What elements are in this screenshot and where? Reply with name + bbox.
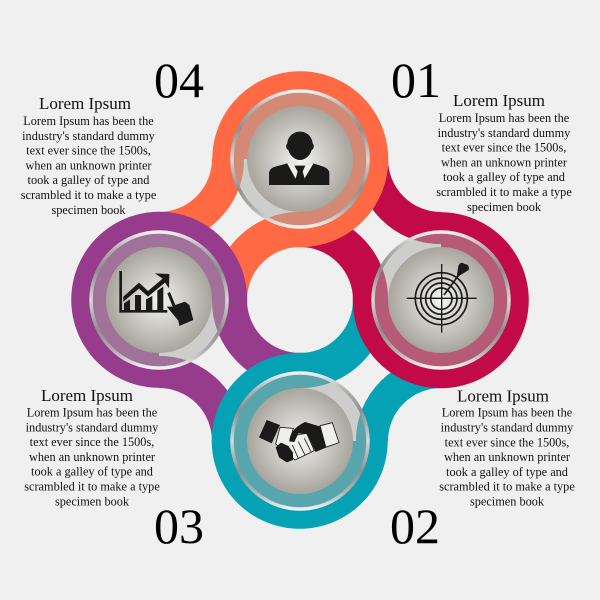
text block: 04: industry's standard dummy <box>22 129 156 143</box>
text block: 03: Lorem Ipsum <box>41 386 133 405</box>
ring: 02 right crimson <box>353 212 529 388</box>
icon: target with dart <box>407 263 477 333</box>
number 01: 01 <box>391 52 441 108</box>
text block: 01 <box>436 91 572 214</box>
ring: 04 left purple <box>71 212 247 388</box>
text block: 04: took a galley of type and <box>28 173 149 187</box>
text block: 03 <box>24 386 160 508</box>
text block: 01: industry's standard dummy <box>438 126 571 140</box>
text block: 04: text ever since the 1500s, <box>26 144 151 158</box>
ring: 03 bottom teal <box>212 353 388 529</box>
text block: 04: scrambled it to make a type <box>21 188 157 202</box>
text block: 01: specimen book <box>467 200 542 214</box>
text block: 02: specimen book <box>470 494 545 508</box>
text block: 03: Lorem Ipsum has been the <box>27 406 158 420</box>
text block: 03: industry's standard dummy <box>26 420 159 434</box>
icon: handshake <box>259 420 339 462</box>
number 04: 04 <box>154 52 204 108</box>
text block: 02 <box>439 386 575 508</box>
text block: 03: when an unknown printer <box>29 450 155 464</box>
text block: 02: text ever since the 1500s, <box>445 435 569 449</box>
icon: growth chart with pointing hand <box>119 271 193 326</box>
text block: 04: Lorem Ipsum <box>39 94 131 113</box>
text block: 04: when an unknown printer <box>25 158 152 172</box>
text block: 01: Lorem Ipsum <box>453 91 545 110</box>
text block: 02: Lorem Ipsum has been the <box>442 406 573 420</box>
text block: 04: specimen book <box>51 203 126 217</box>
text block: 03: scrambled it to make a type <box>24 480 160 494</box>
text block: 02: took a galley of type and <box>446 465 568 479</box>
connecting arcs <box>159 159 441 441</box>
ring: 01 top orange <box>212 71 388 247</box>
number 02: 02 <box>390 498 440 554</box>
number 03: 03 <box>154 498 204 554</box>
text block: 01: Lorem Ipsum has been the <box>439 111 570 125</box>
text block: 01: took a galley of type and <box>443 170 565 184</box>
text block: 02: industry's standard dummy <box>441 420 574 434</box>
text block: 01: when an unknown printer <box>441 155 567 169</box>
text block: 02: Lorem Ipsum <box>457 386 549 406</box>
text block: 04 <box>21 94 157 217</box>
icon: businessman <box>269 132 329 185</box>
text block: 01: scrambled it to make a type <box>436 185 572 199</box>
text block: 02: when an unknown printer <box>444 450 570 464</box>
text block: 03: text ever since the 1500s, <box>30 435 154 449</box>
text block: 01: text ever since the 1500s, <box>442 141 566 155</box>
text block: 03: took a galley of type and <box>31 465 153 479</box>
text block: 03: specimen book <box>55 494 130 508</box>
text block: 04: Lorem Ipsum has been the <box>23 114 154 128</box>
text block: 02: scrambled it to make a type <box>439 480 575 494</box>
